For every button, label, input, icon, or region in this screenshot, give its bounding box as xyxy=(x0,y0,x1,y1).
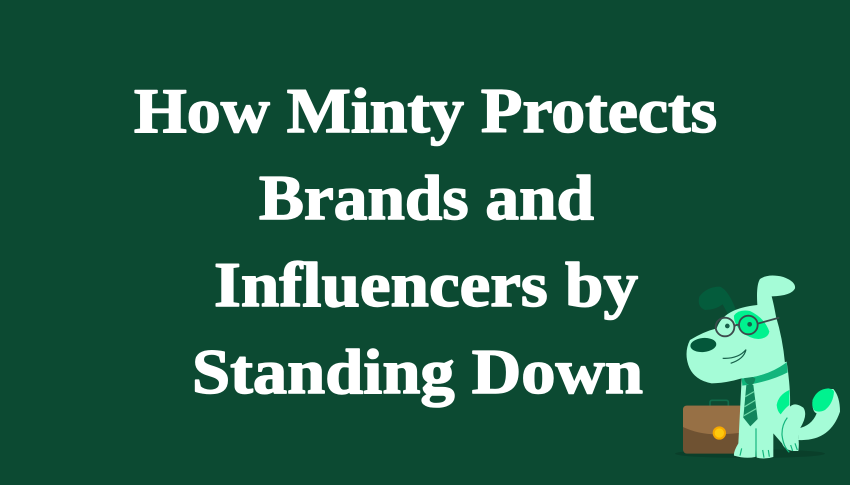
dog smile xyxy=(723,350,746,363)
title xyxy=(134,75,717,407)
dog nose xyxy=(690,337,717,353)
dog eyes xyxy=(725,322,752,328)
dog tail xyxy=(798,388,840,440)
ground shadow xyxy=(675,449,825,458)
title: How Minty Protects xyxy=(134,75,717,146)
title: Influencers by xyxy=(214,249,638,320)
dog body xyxy=(734,362,805,459)
dog head and near ear xyxy=(687,276,795,383)
glasses xyxy=(716,316,779,336)
dog collar xyxy=(742,362,788,386)
title: Brands and xyxy=(259,162,594,233)
dog front leg outline xyxy=(740,418,797,458)
mascot: dog with briefcase xyxy=(675,276,840,459)
dog hind leg patch xyxy=(777,390,789,414)
icon: briefcase xyxy=(683,400,746,454)
dog eye patch xyxy=(734,311,769,339)
dog far ear xyxy=(699,287,736,315)
title: Standing Down xyxy=(192,336,643,407)
dog tie xyxy=(743,377,758,426)
